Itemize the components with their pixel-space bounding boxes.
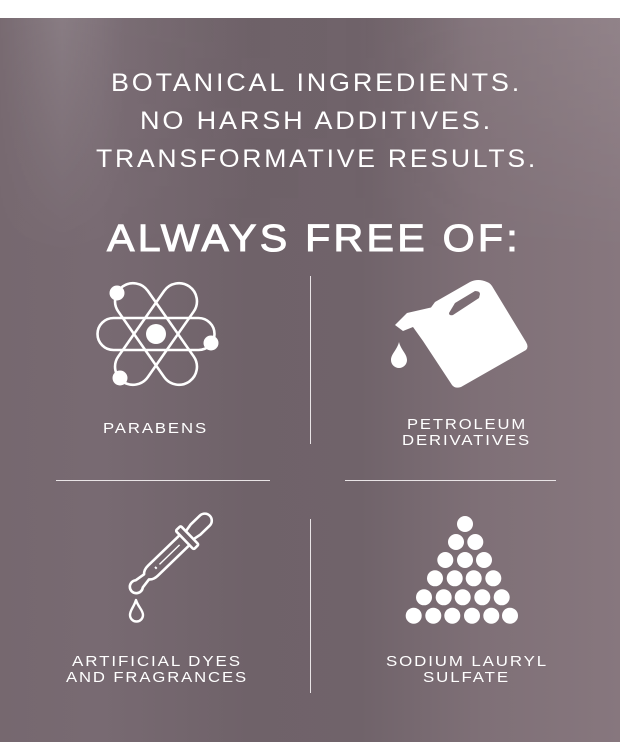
label: petroleum derivatives: DERIVATIVES bbox=[402, 432, 531, 449]
headline: botanical ingredients: NO HARSH ADDITIVES. bbox=[140, 107, 493, 135]
divider: bottom vertical bbox=[310, 519, 311, 693]
divider: top vertical bbox=[310, 276, 311, 444]
label: artificial dyes and fragrances: ARTIFICIAL DYES bbox=[72, 653, 242, 670]
label: parabens: PARABENS bbox=[103, 420, 208, 437]
label: sodium lauryl sulfate: SULFATE bbox=[423, 669, 510, 686]
headline: botanical ingredients: TRANSFORMATIVE RESULTS. bbox=[96, 145, 538, 173]
heading: always free of: ALWAYS FREE OF: bbox=[107, 218, 521, 260]
label: sodium lauryl sulfate: SODIUM LAURYL bbox=[386, 653, 548, 670]
headline: botanical ingredients: BOTANICAL INGREDIENTS. bbox=[111, 69, 522, 97]
icon: dropper droplet bbox=[130, 600, 143, 622]
icon: dropper (artificial dyes) bbox=[123, 506, 219, 622]
divider: right horizontal bbox=[345, 480, 556, 481]
icon: atom (parabens) bbox=[98, 276, 218, 392]
label: petroleum derivatives bbox=[402, 416, 531, 449]
label: artificial dyes and fragrances: AND FRAGRANCES bbox=[66, 669, 248, 686]
label: sodium lauryl sulfate bbox=[386, 653, 548, 686]
headline: botanical ingredients bbox=[96, 69, 538, 173]
icon: sphere pyramid (sodium lauryl sulfate) bbox=[406, 516, 518, 624]
divider: left horizontal bbox=[56, 480, 270, 481]
label: petroleum derivatives: PETROLEUM bbox=[407, 416, 527, 433]
label: artificial dyes and fragrances bbox=[66, 653, 248, 686]
icon: oil jug (petroleum) bbox=[391, 280, 528, 388]
